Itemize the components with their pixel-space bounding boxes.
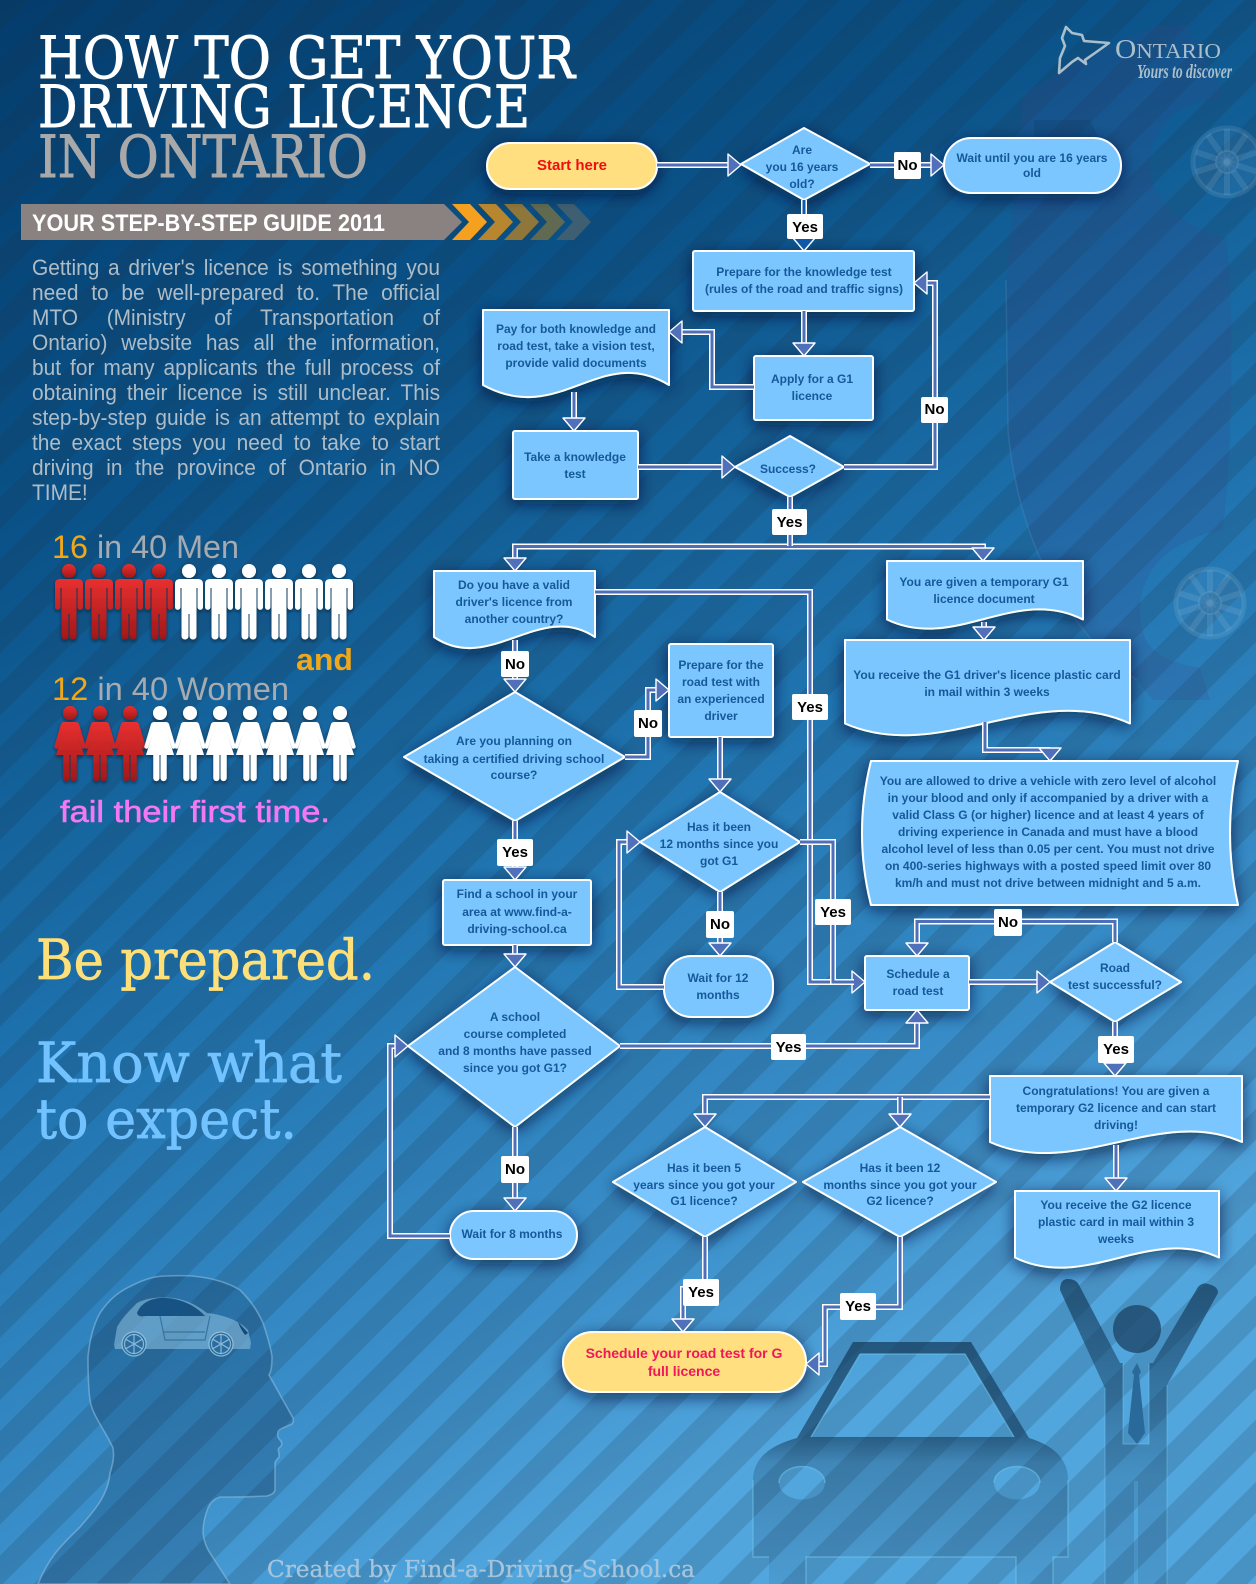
node: find a school: driving-school.ca [467, 922, 567, 936]
arrow: success no [844, 272, 935, 467]
node: take knowledge test: Take a knowledge [524, 450, 626, 464]
decision: road test successful: test successful? [1068, 978, 1162, 992]
arrow: card to rules [985, 722, 1061, 761]
decision: school completed: since you got G1? [463, 1061, 567, 1075]
node: prepare road test: Prepare for the [678, 658, 764, 672]
decision: road test successful [1050, 942, 1181, 1022]
arrow: school no [625, 679, 669, 757]
intro paragraph: but for many applicants the full process of [32, 355, 440, 380]
intro paragraph: need to be well-prepared to. The official [32, 280, 440, 305]
fail statement: fail their first time. [60, 794, 330, 829]
document: pay [483, 310, 669, 397]
end node: schedule G test [563, 1332, 806, 1392]
label: no age [894, 152, 921, 179]
and connector word: and [296, 642, 353, 677]
node: wait 8 months: Wait for 8 months [462, 1227, 563, 1241]
document: G2 card [1015, 1191, 1219, 1268]
decision: 5 years G1: Has it been 5 [667, 1161, 741, 1175]
arrow: prepare to apply [793, 311, 815, 356]
document: G2 card: You receive the G2 licence [1040, 1198, 1192, 1212]
node: apply G1: licence [792, 389, 833, 403]
decision: 5 years G1: G1 licence? [670, 1194, 738, 1208]
label: yes school: Yes [502, 844, 528, 861]
document: valid licence: driver's licence from [456, 595, 572, 609]
arrow: prepare road to 12 months [709, 737, 731, 792]
label: yes school [497, 839, 533, 866]
decision: success: Success? [760, 462, 816, 476]
decision: 12 months G2: Has it been 12 [860, 1161, 941, 1175]
label: no road test [994, 909, 1022, 936]
intro paragraph [32, 255, 440, 505]
decision: success [735, 436, 844, 497]
label: yes road test [1098, 1036, 1134, 1063]
node: find a school [443, 880, 591, 945]
subtitle banner: YOUR STEP-BY-STEP GUIDE 2011 [32, 210, 385, 237]
arrow: success yes stem [787, 497, 793, 546]
document: plastic card G1 [845, 640, 1130, 735]
label: no school [634, 710, 662, 737]
intro paragraph: obtaining their licence is still unclear. This [32, 380, 440, 405]
end node: schedule G test: Schedule your road test for G [586, 1345, 783, 1361]
decision: 12 months G2: months since you got your [823, 1178, 977, 1192]
node: schedule road test [865, 956, 969, 1010]
document: G1 rules [862, 761, 1238, 905]
node: schedule road test: road test [893, 984, 943, 998]
connectors [390, 154, 1127, 1375]
arrow: find school to completed [504, 945, 526, 967]
document: G1 rules: km/h and must not drive between midnight and 5 a.m. [895, 876, 1201, 890]
decision: 12 months G1 [640, 792, 800, 892]
node: prepare road test: road test with [682, 675, 760, 689]
label: yes 12 months G2 [840, 1293, 876, 1320]
label: no 12 months [706, 911, 734, 938]
label: yes foreign licence: Yes [797, 699, 823, 716]
node: apply G1: Apply for a G1 [771, 372, 853, 386]
arrow: apply to pay [669, 321, 754, 387]
document: plastic card G1: You receive the G1 driver's licence plastic card [853, 668, 1121, 682]
arrow: branch to licence question [504, 546, 790, 571]
arrow: school yes [504, 821, 526, 880]
document: G1 rules: in your blood and only if accompanied by a driver with a [888, 791, 1209, 805]
document: G1 rules: valid Class G (or higher) licence and at least 4 years of [892, 808, 1205, 822]
arrow: temporary to card [973, 622, 995, 640]
decision: school completed [408, 967, 620, 1127]
decision: 5 years G1: years since you got your [633, 1178, 775, 1192]
arrow: congrats to G2 card [1105, 1145, 1127, 1191]
arrow: foreign licence no [504, 640, 526, 692]
decision: 12 months G1: 12 months since you [660, 837, 778, 851]
node: take knowledge test: test [564, 467, 586, 481]
intro paragraph: MTO (Ministry of Transportation of [32, 305, 440, 330]
yes and no labels [497, 152, 1134, 1320]
arrow: wait 12 loop [619, 831, 664, 987]
decision: age 16: old? [789, 177, 815, 191]
intro paragraph: the exact steps you need to take to start [32, 430, 440, 455]
node: wait 12 months [664, 956, 773, 1017]
document: pay: provide valid documents [505, 356, 647, 370]
arrow: wait 8 loop [390, 1035, 450, 1236]
slogan: be prepared: Be prepared. [36, 928, 375, 992]
node: prepare knowledge test: (rules of the road and traffic signs) [705, 282, 903, 296]
Ontario logo [1059, 27, 1232, 83]
document: G2 card: plastic card in mail within 3 [1038, 1215, 1194, 1229]
label: yes 5 years: Yes [688, 1284, 714, 1301]
end node: schedule G test: full licence [648, 1363, 720, 1379]
decision: school completed: A school [490, 1010, 540, 1024]
decision: driving school [404, 692, 625, 821]
label: yes 12 months [815, 899, 851, 925]
node: prepare road test [669, 644, 773, 737]
node: wait until 16: Wait until you are 16 years [957, 151, 1108, 165]
decision: 12 months G2 [803, 1127, 996, 1237]
arrow: start to age [657, 154, 741, 176]
arrow: knowledge test to success [638, 456, 735, 478]
embossed car front [753, 1342, 1068, 1584]
label: yes success: Yes [777, 514, 802, 531]
start node [487, 143, 657, 189]
intro paragraph: step-by-step guide is an attempt to explain [32, 405, 440, 430]
arrow: road test no [906, 922, 1115, 956]
slogan: know what to expect [36, 1031, 342, 1151]
title: DRIVING LICENCE [38, 73, 530, 141]
decision: 5 years G1 [613, 1127, 796, 1237]
node: wait 8 months [450, 1211, 577, 1259]
label: no success: No [924, 401, 944, 418]
node: prepare road test: driver [704, 709, 738, 723]
label: yes 5 years [683, 1279, 719, 1306]
document: G1 rules: on 400-series highways with a posted speed limit over 80 [885, 859, 1211, 873]
document: valid licence: another country? [465, 612, 563, 626]
node: take knowledge test [513, 431, 638, 499]
arrow: congrats to 5 years [694, 1097, 990, 1127]
label: yes success [772, 509, 807, 535]
arrow: foreign licence yes [595, 592, 865, 993]
document: congratulations: temporary G2 licence and can start [1016, 1101, 1216, 1115]
Ontario logo: ONTARIO [1115, 34, 1221, 64]
slogan: know what to expect: to expect. [36, 1087, 297, 1151]
title: HOW TO GET YOUR [38, 24, 577, 92]
decision: 12 months G1: got G1 [700, 854, 738, 868]
label: no success [921, 397, 948, 423]
label: yes 12 months G2: Yes [845, 1298, 871, 1315]
intro paragraph: Ontario) website has all the information, [32, 330, 440, 355]
label: yes age [787, 214, 823, 239]
document: pay: Pay for both knowledge and [496, 322, 656, 336]
document: congratulations: driving! [1094, 1118, 1138, 1132]
footer credit: Created by Find-a-Driving-School.ca [267, 1557, 695, 1583]
node: schedule road test: Schedule a [886, 967, 950, 981]
label: yes road test: Yes [1103, 1041, 1129, 1058]
decision: driving school: taking a certified driving school [424, 752, 604, 766]
node: find a school: area at www.find-a- [462, 905, 572, 919]
intro paragraph: Getting a driver's licence is something you [32, 255, 440, 280]
statistic: men: 16 in 40 Men [52, 529, 239, 565]
arrow: 12 months G2 yes [806, 1237, 900, 1375]
arrow: branch to temporary G1 [790, 546, 994, 561]
document: congratulations [990, 1076, 1242, 1153]
label: no completed [501, 1156, 529, 1183]
label: no road test: No [998, 914, 1018, 931]
decision: age 16: you 16 years [766, 160, 839, 174]
node: prepare knowledge test: Prepare for the knowledge test [716, 265, 892, 279]
decision: 12 months G1: Has it been [687, 820, 751, 834]
node: apply G1 [754, 356, 873, 420]
node: wait 12 months: months [696, 988, 740, 1002]
arrow: age yes [793, 200, 815, 251]
flowchart [390, 128, 1242, 1392]
decision: driving school: course? [491, 768, 537, 782]
document: temporary G1: licence document [933, 592, 1035, 606]
decision: 12 months G2: G2 licence? [866, 1194, 934, 1208]
arrow: road test yes [1104, 1022, 1126, 1076]
statistic: men [52, 529, 353, 640]
document: temporary G1 [887, 561, 1083, 629]
label: no foreign licence [501, 651, 529, 677]
decision: driving school: Are you planning on [456, 734, 572, 748]
arrow: schedule to road test [969, 971, 1050, 993]
node: wait 12 months: Wait for 12 [688, 971, 749, 985]
node: prepare road test: an experienced [677, 692, 765, 706]
intro paragraph: driving in the province of Ontario in NO [32, 455, 440, 480]
document: congratulations: Congratulations! You are given a [1023, 1084, 1210, 1098]
label: no age: No [898, 157, 918, 174]
label: yes 12 months: Yes [820, 904, 846, 921]
title [38, 24, 577, 191]
statistic: women: 12 in 40 Women [52, 671, 289, 707]
document: G1 rules: driving experience in Canada and must have a blood [898, 825, 1198, 839]
decision: road test successful: Road [1100, 961, 1130, 975]
arrow: 12 months yes [800, 842, 854, 982]
label: yes completed [771, 1034, 806, 1060]
decision: school completed: course completed [464, 1027, 566, 1041]
node: find a school: Find a school in your [457, 887, 578, 901]
title: IN ONTARIO [38, 123, 368, 191]
node: wait until 16 [944, 138, 1121, 193]
arrow: completed no [504, 1127, 526, 1211]
document: valid licence: Do you have a valid [458, 578, 570, 592]
label: yes age: Yes [792, 219, 818, 236]
arrow: 5 years yes [672, 1237, 705, 1332]
statistic: women [52, 671, 356, 781]
label: no school: No [638, 715, 658, 732]
slogan: know what to expect: Know what [36, 1031, 342, 1095]
decision: age 16: Are [792, 143, 812, 157]
intro paragraph: TIME! [32, 480, 88, 505]
label: yes foreign licence [792, 694, 828, 720]
label: no 12 months: No [710, 916, 730, 933]
background car top view [1006, 25, 1256, 700]
node: wait until 16: old [1023, 166, 1041, 180]
document: G2 card: weeks [1097, 1232, 1134, 1246]
decision: school completed: and 8 months have passed [438, 1044, 592, 1058]
icon: car in head [114, 1298, 251, 1356]
arrow: 12 months no [709, 892, 731, 956]
embossed person arms up [1060, 1279, 1218, 1584]
label: no foreign licence: No [505, 656, 525, 673]
document: temporary G1: You are given a temporary G1 [899, 575, 1069, 589]
arrow: age no [870, 154, 944, 176]
node: prepare knowledge test [693, 251, 914, 311]
document: plastic card G1: in mail within 3 weeks [924, 685, 1050, 699]
document: G1 rules: alcohol level of less than 0.05 per cent. You must not drive [882, 842, 1215, 856]
document: G1 rules: You are allowed to drive a vehicle with zero level of alcohol [880, 774, 1216, 788]
subtitle banner [21, 204, 591, 240]
arrow: completed yes [620, 1010, 928, 1046]
decision: age 16 [741, 128, 870, 200]
arrow: congrats to 12 months [889, 1097, 911, 1127]
head silhouette with car thought [38, 1276, 293, 1584]
document: pay: road test, take a vision test, [497, 339, 655, 353]
label: yes completed: Yes [776, 1039, 801, 1056]
start node: Start here [537, 157, 607, 174]
document: valid licence [434, 571, 595, 648]
label: no completed: No [505, 1161, 525, 1178]
arrow: pay to knowledge test [563, 392, 585, 431]
